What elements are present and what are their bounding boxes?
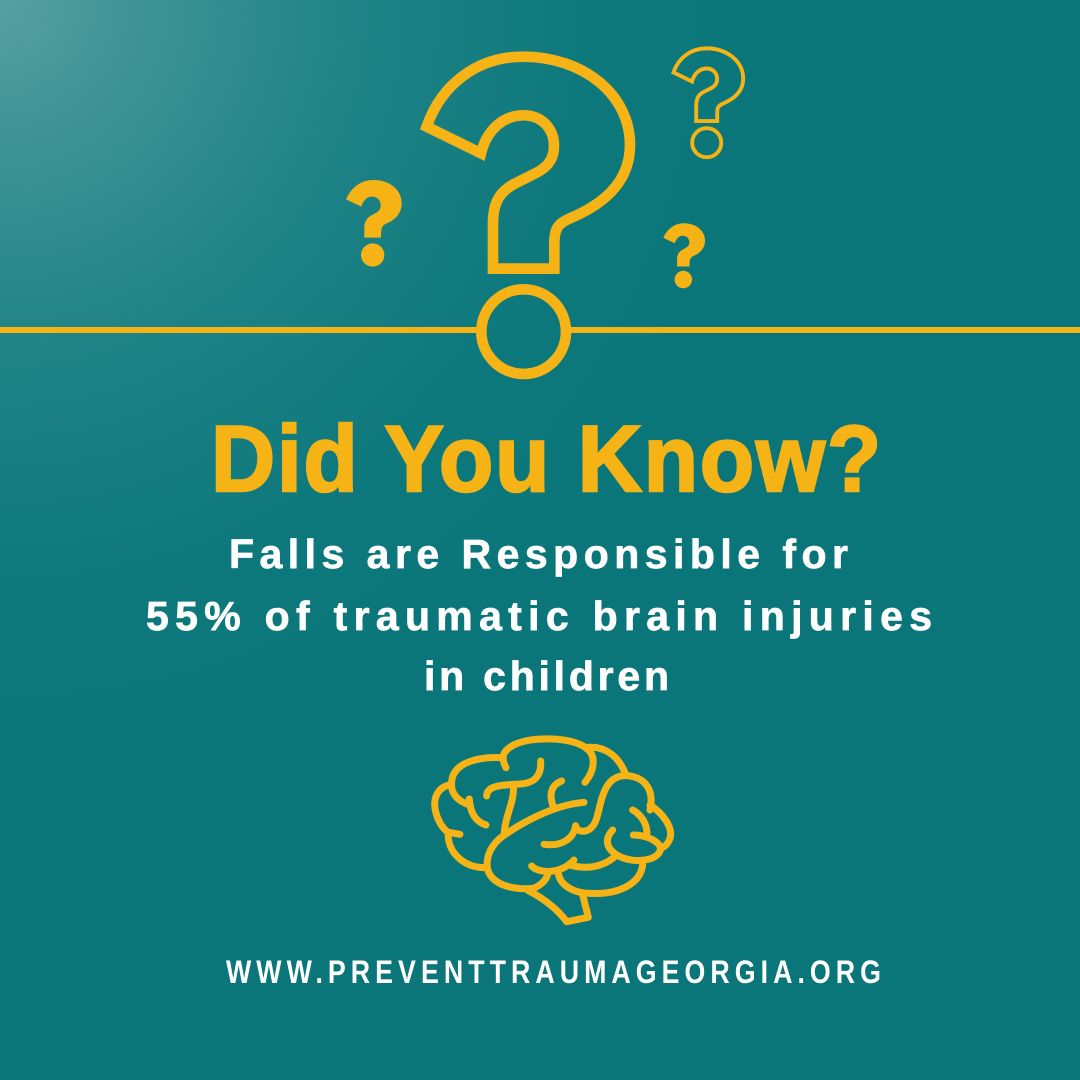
horizontal line left xyxy=(0,327,478,333)
icon: solid question mark left xyxy=(346,180,402,267)
website url: WWW.PREVENTTRAUMAGEORGIA.ORG xyxy=(226,954,886,990)
icon: small outlined question mark xyxy=(673,48,743,157)
horizontal line right xyxy=(570,327,1080,333)
body text: Falls are Responsible for xyxy=(229,531,848,577)
icon: large outlined question mark xyxy=(427,57,630,374)
icon: brain xyxy=(435,739,671,922)
body text: in children xyxy=(424,653,669,699)
body text: 55% of traumatic brain injuries xyxy=(146,593,932,639)
icon: solid question mark right xyxy=(663,223,705,288)
body text xyxy=(146,531,932,699)
title: Did You Know? xyxy=(211,406,883,511)
